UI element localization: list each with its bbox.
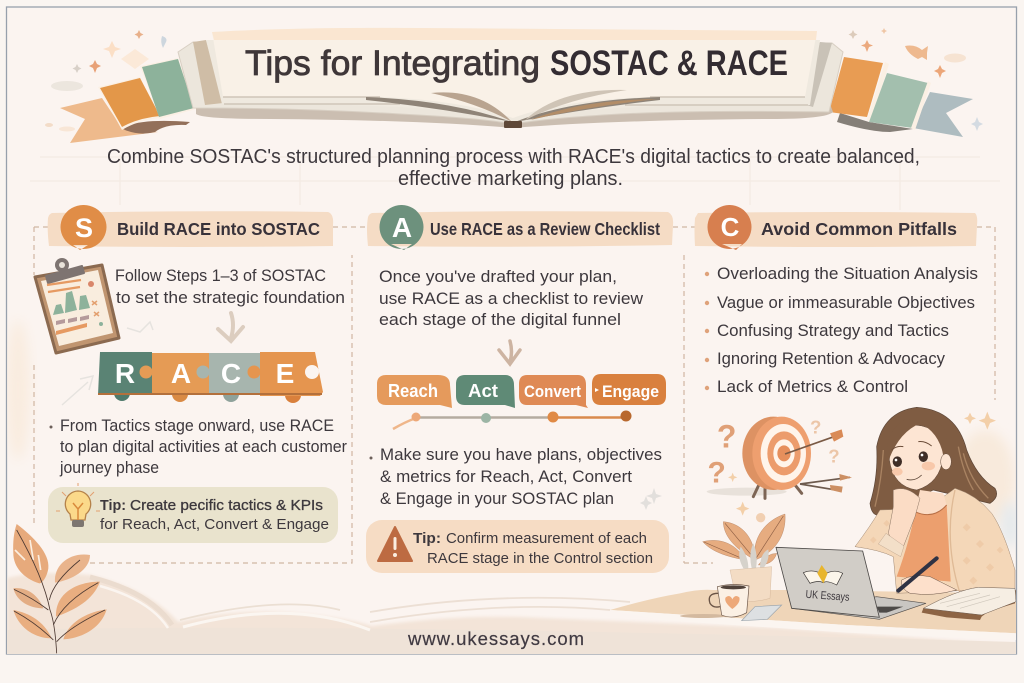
RACE stage speech bubbles: Reach	[388, 381, 438, 401]
tip box: Tip:	[100, 497, 126, 514]
left ribbon	[60, 58, 196, 143]
coffee mug	[680, 584, 749, 618]
subtitle: effective marketing plans.	[398, 168, 623, 190]
heading A	[367, 205, 673, 250]
arrow down	[499, 341, 520, 364]
pitfalls list: Overloading the Situation Analysis	[717, 265, 978, 283]
pitfalls list: Confusing Strategy and Tactics	[717, 322, 949, 340]
question marks	[708, 420, 838, 482]
RACE stage speech bubbles: Engage	[602, 382, 659, 401]
RACE stage speech bubbles: Act	[468, 381, 498, 401]
banner book with title	[178, 28, 843, 128]
small arrow decoration	[62, 322, 153, 405]
intro text: each stage of the digital funnel	[379, 311, 621, 329]
tip box: Confirm measurement of each	[446, 530, 647, 547]
illustration: target, girl and desk	[610, 407, 1017, 640]
question marks: ?	[810, 416, 821, 437]
puzzle RACE: C	[221, 358, 241, 389]
pitfalls list: Vague or immeasurable Objectives	[717, 294, 975, 312]
title: SOSTAC & RACE	[550, 44, 788, 83]
bullet text	[50, 417, 347, 477]
sparkle decoration	[640, 488, 662, 510]
bullet text: journey phase	[59, 459, 159, 477]
icon: light bulb	[56, 483, 100, 527]
bullet text: to plan digital activities at each customer	[60, 438, 347, 456]
tip box	[366, 520, 669, 573]
desk surface	[610, 590, 1017, 640]
sparkles	[728, 412, 996, 516]
subtitle	[107, 146, 920, 190]
RACE stage speech bubbles: Convert	[524, 382, 581, 401]
bottom background wash	[7, 573, 1017, 654]
heading A: A	[392, 212, 412, 243]
illustration: leaf branch	[13, 524, 107, 653]
decorative sparkles around banner	[45, 28, 983, 132]
phone	[742, 605, 782, 621]
puzzle RACE: E	[276, 358, 294, 389]
puzzle RACE: A	[171, 358, 191, 389]
intro text: Once you've drafted your plan,	[379, 268, 617, 286]
tip box: RACE stage in the Control section	[427, 550, 653, 567]
heading S: Build RACE into SOSTAC	[117, 219, 320, 239]
right ribbon	[829, 57, 973, 137]
intro text: to set the strategic foundation	[116, 289, 345, 307]
question marks: ?	[828, 446, 840, 467]
intro text: use RACE as a checklist to review	[379, 290, 643, 308]
laptop with UK Essays logo: UK Essays	[805, 589, 850, 604]
pitfalls list	[705, 265, 978, 396]
heading C	[694, 205, 977, 250]
heading C: C	[721, 212, 740, 242]
icon: target with arrows	[707, 417, 852, 498]
pitfalls list: Ignoring Retention & Advocacy	[717, 350, 946, 368]
subtitle: Combine SOSTAC's structured planning process with RACE's digital tactics to create balanced,	[107, 146, 920, 168]
plant in pot	[703, 514, 785, 602]
open notebook	[922, 587, 1016, 620]
heading S	[48, 205, 333, 250]
pitfalls list: Lack of Metrics & Control	[717, 378, 908, 396]
heading C: Avoid Common Pitfalls	[761, 219, 957, 239]
panel: build RACE into SOSTAC	[35, 205, 347, 543]
question marks: ?	[717, 418, 736, 454]
girl	[855, 407, 1015, 594]
icon: clipboard	[35, 258, 119, 353]
intro text	[115, 267, 345, 307]
puzzle RACE	[98, 352, 323, 403]
title	[245, 49, 787, 83]
question marks: ?	[708, 457, 726, 490]
bullet text: Make sure you have plans, objectives	[380, 446, 662, 464]
background washes left and right	[6, 320, 1020, 549]
tip box	[48, 483, 338, 543]
website url: www.ukessays.com	[407, 628, 584, 649]
title: Tips for Integrating	[245, 44, 540, 83]
tip box: Create pecific tactics & KPIs	[130, 497, 323, 514]
panel: avoid common pitfalls	[694, 205, 978, 396]
intro text: Follow Steps 1–3 of SOSTAC	[115, 267, 326, 285]
icon: warning triangle	[378, 527, 412, 561]
tip box: for Reach, Act, Convert & Engage	[100, 516, 329, 533]
tip box: Tip:	[413, 530, 441, 547]
puzzle RACE: R	[115, 358, 135, 389]
bullet text: From Tactics stage onward, use RACE	[60, 417, 334, 435]
laptop with UK Essays logo	[776, 547, 926, 619]
RACE stage speech bubbles	[377, 374, 666, 408]
bullet text: & metrics for Reach, Act, Convert	[380, 468, 632, 486]
panel: use RACE as a review checklist	[366, 205, 673, 573]
intro text	[379, 268, 643, 329]
bullet text	[370, 446, 662, 508]
heading S: S	[75, 213, 93, 243]
journey timeline	[393, 410, 632, 429]
heading A: Use RACE as a Review Checklist	[430, 219, 660, 239]
arrow down	[218, 313, 243, 341]
bullet text: & Engage in your SOSTAC plan	[380, 490, 614, 508]
